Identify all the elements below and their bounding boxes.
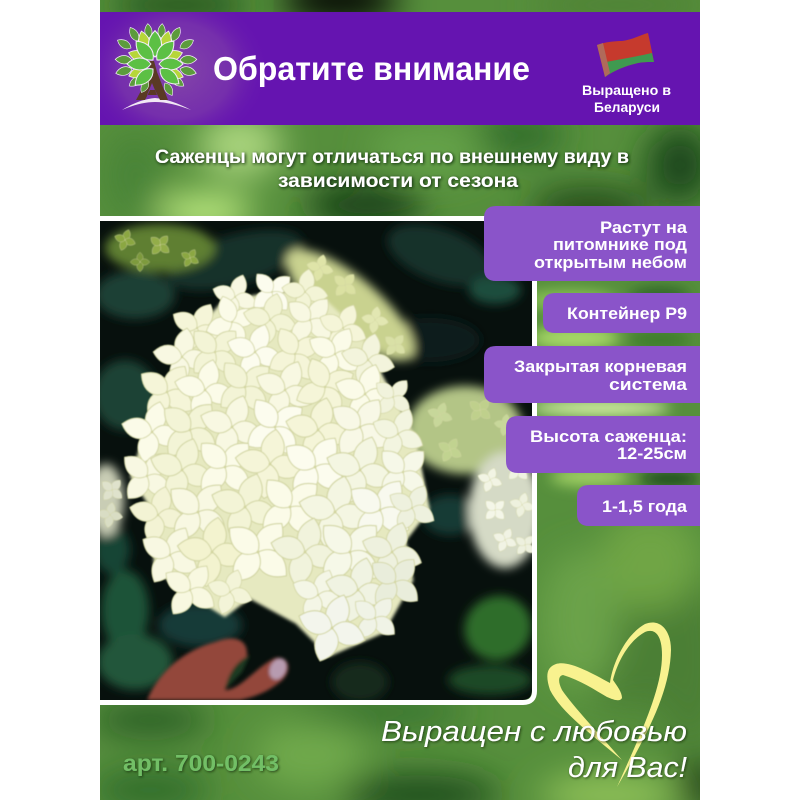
- callout: age: 1-1,5 года: [602, 498, 688, 516]
- hydrangea bloom: [120, 268, 435, 662]
- leaves mid: [127, 30, 185, 82]
- background: blurred green foliage: [90, 0, 725, 800]
- slogan: grown with love: [381, 716, 687, 784]
- callout: seedling height: 12-25см: [617, 445, 687, 463]
- callout: seedling height: [506, 416, 700, 473]
- icon: company tree logo: [115, 23, 197, 110]
- callout: grown outdoors: Растут на: [600, 219, 688, 237]
- callout: grown outdoors: открытым небом: [534, 254, 687, 272]
- callout: grown outdoors: [484, 206, 700, 281]
- callout: closed root system: Закрытая корневая: [514, 358, 687, 376]
- label: grown in Belarus: [582, 82, 671, 115]
- callout: container: Контейнер Р9: [567, 305, 687, 323]
- leaves outer: [115, 23, 197, 97]
- article number: арт. 700-0243: [123, 750, 279, 776]
- photo frame: [100, 218, 534, 702]
- ground arcs: [122, 98, 191, 110]
- icon: Belarus flag: [597, 33, 654, 77]
- heading: attention: Обратите внимание: [213, 50, 530, 87]
- background bloom florets: [94, 226, 541, 561]
- label: grown in Belarus: Беларуси: [594, 99, 660, 115]
- subtitle: seedlings notice: [155, 146, 629, 192]
- header band: [100, 12, 700, 125]
- soft background bloom masses: [105, 224, 215, 272]
- slogan: grown with love: Выращен с любовью: [381, 716, 687, 748]
- label: grown in Belarus: Выращено в: [582, 82, 671, 98]
- slogan: grown with love: для Вас!: [568, 752, 687, 784]
- callout: grown outdoors: питомнике под: [553, 236, 688, 254]
- hand holding the bloom: [147, 638, 290, 700]
- icon: hand-drawn yellow heart: [547, 622, 671, 787]
- subtitle: seedlings notice: зависимости от сезона: [278, 170, 518, 192]
- foliage in the photo: [88, 212, 542, 702]
- callout: closed root system: система: [609, 376, 688, 394]
- photo: white hydrangea with hand: [88, 212, 542, 702]
- callout: seedling height: Высота саженца:: [530, 428, 687, 446]
- callout: age: [577, 485, 700, 526]
- leaves inner: [127, 31, 183, 90]
- callout: container: [543, 293, 700, 333]
- trunk: [136, 61, 168, 100]
- subtitle: seedlings notice: Саженцы могут отличаться по внешнему виду в: [155, 146, 629, 168]
- callout: closed root system: [484, 346, 700, 403]
